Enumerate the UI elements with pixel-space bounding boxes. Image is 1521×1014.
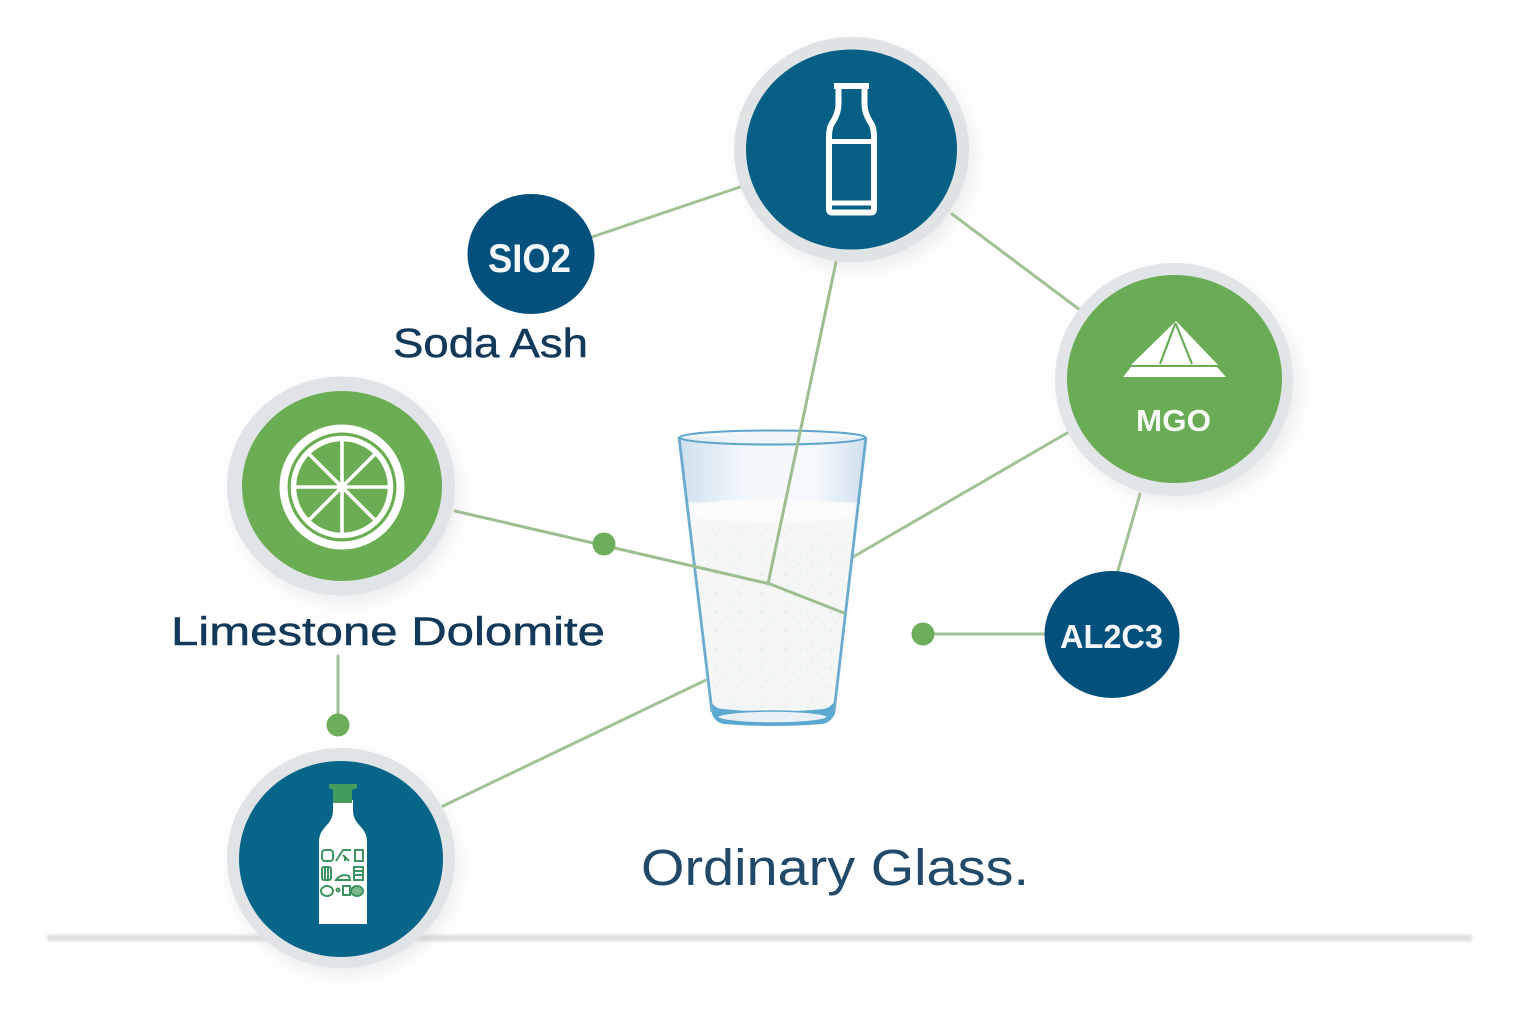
icon: labelled bottle <box>319 784 367 924</box>
glass glow <box>679 437 866 722</box>
connector dots <box>326 532 934 736</box>
node: patterned bottle <box>227 748 457 974</box>
glass outline <box>679 437 866 712</box>
glass base <box>710 700 836 726</box>
ground line <box>47 935 1472 941</box>
glass air region <box>679 437 866 502</box>
label: SIO2: SIO2 <box>488 237 571 281</box>
node: Al2C3 <box>1044 571 1180 698</box>
connectors over glass <box>455 262 844 613</box>
label: Limestone Dolomite: Limestone Dolomite <box>171 610 605 654</box>
node: SiO2 <box>468 194 594 314</box>
node: MgO <box>1055 263 1298 501</box>
glass rim <box>680 430 866 444</box>
glass of ordinary glass <box>679 430 866 726</box>
node: lime <box>227 376 458 602</box>
icon: milk bottle <box>829 86 874 212</box>
icon: lime slice <box>284 428 400 546</box>
label: MGO: MGO <box>1136 403 1211 438</box>
glass liquid <box>689 500 856 717</box>
connector lines <box>338 187 1140 806</box>
glass foam <box>690 499 855 522</box>
label: AL2C3: AL2C3 <box>1060 618 1163 655</box>
icon: mountain <box>1123 321 1226 377</box>
bottle label pattern <box>321 850 363 896</box>
title: Ordinary Glass: Ordinary Glass. <box>641 839 1029 896</box>
label: Soda Ash: Soda Ash <box>393 320 588 366</box>
node: top bottle <box>734 37 973 268</box>
